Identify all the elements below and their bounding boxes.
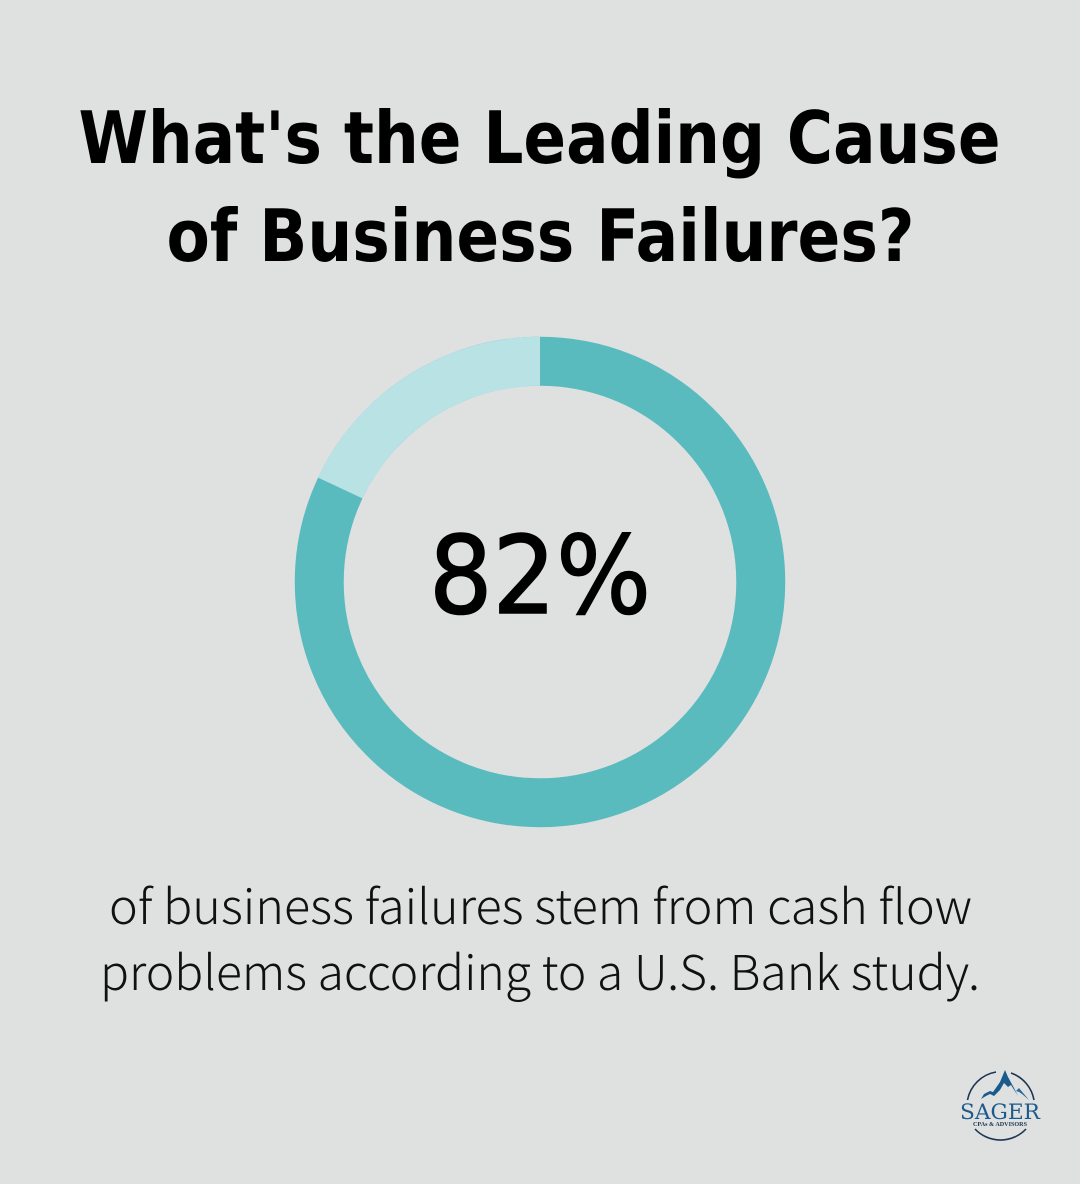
logo wordmark: SAGER bbox=[960, 1100, 1041, 1124]
logo ring arcs bbox=[968, 1072, 1034, 1140]
title: of Business Failures? bbox=[166, 194, 914, 278]
description text: of business failures stem from cash flow bbox=[109, 868, 972, 938]
donut chart: 82% bbox=[319, 361, 761, 803]
center value: 82%: 82% bbox=[429, 514, 651, 639]
description text: problems according to a U.S. Bank study. bbox=[100, 934, 980, 1004]
logo: Sager CPAs & Advisors bbox=[960, 1070, 1041, 1140]
logo tagline: CPAs & ADVISORS bbox=[973, 1122, 1028, 1128]
description text bbox=[100, 868, 980, 1004]
logo mountains bbox=[981, 1070, 1018, 1099]
title bbox=[78, 96, 1000, 278]
